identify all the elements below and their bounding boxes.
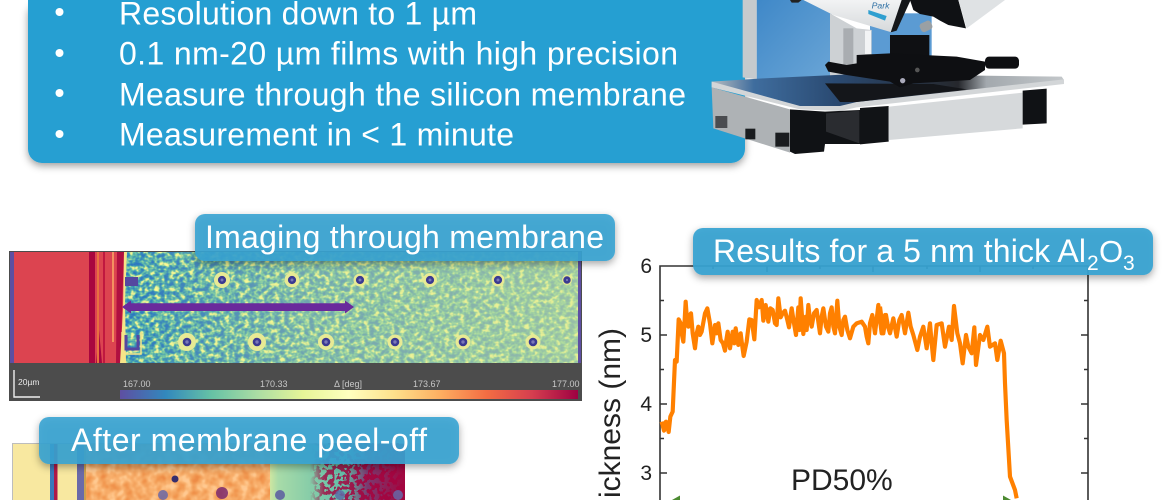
label: after membrane peel-off: After membrane peel-off [71, 422, 427, 458]
bullet list of specifications [56, 0, 686, 152]
colour scale [120, 379, 580, 399]
membrane texture map [124, 252, 580, 363]
bullet list of specifications: Measure through the silicon membrane [119, 76, 686, 112]
y-axis tick labels [640, 255, 652, 485]
PD50% annotation: PD50% [791, 464, 893, 497]
arrow: purple scan line [122, 300, 354, 314]
label: results for 5 nm Al2O3: O [1099, 234, 1123, 269]
colour scale: 173.67 [413, 379, 441, 389]
scale bar: 20µm [18, 377, 39, 387]
y-axis tick labels: 6 [640, 255, 652, 278]
scale bar [14, 370, 40, 397]
label: results for 5 nm Al2O3: Results for a 5 nm thick Al [713, 233, 1086, 269]
label: results for 5 nm Al2O3: 3 [1123, 252, 1135, 275]
surface defects [158, 476, 403, 500]
chart frame and ticks [660, 266, 1088, 500]
colour scale: 177.00 [552, 379, 580, 389]
bullet list of specifications: 0.1 nm-20 µm films with high precision [119, 36, 678, 72]
label: results for 5 nm Al2O3: 2 [1087, 252, 1099, 275]
icon: imaging ellipsometer instrument [712, 0, 1064, 154]
panel: key specifications [28, 0, 745, 163]
colour scale: Δ [deg] [334, 379, 362, 389]
label: imaging through membrane: Imaging through membrane [205, 219, 604, 255]
y-axis tick labels: 5 [640, 324, 652, 347]
panel: after membrane peel-off micrograph [12, 443, 405, 500]
peeled region speckle [310, 443, 405, 500]
panel: imaging through membrane micrograph [9, 251, 582, 401]
bullet list of specifications: Measurement in < 1 minute [119, 116, 514, 152]
colour scale: 170.33 [260, 379, 288, 389]
red silicon region [10, 252, 141, 363]
instrument brand mark: Park [872, 1, 890, 11]
chart: thickness profile [594, 255, 1088, 500]
membrane hole markers [178, 272, 572, 351]
arrow: PD50% width markers [672, 496, 1011, 500]
label: results for 5 nm Al2O3 [693, 228, 1153, 275]
label: after membrane peel-off [39, 417, 459, 464]
y-axis tick labels: 3 [640, 462, 652, 485]
colour scale: 167.00 [123, 379, 151, 389]
y-axis tick labels: 4 [640, 393, 652, 416]
orange thickness curve [662, 298, 1017, 498]
